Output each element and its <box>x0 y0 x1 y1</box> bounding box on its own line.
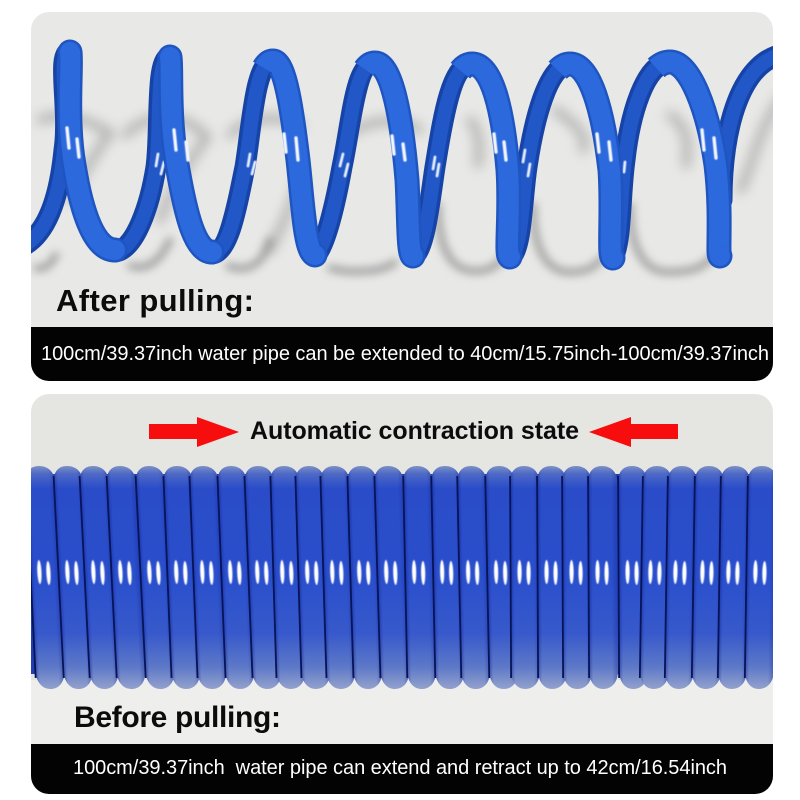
caption bar: after pulling <box>31 327 773 381</box>
heading: automatic contraction state: Automatic contraction state <box>250 417 579 445</box>
photo background <box>31 394 773 680</box>
panel: after pulling <box>25 12 790 381</box>
lower photo strip <box>31 680 773 744</box>
caption: before pulling: 100cm/39.37inch water pipe can extend and retract up to 42cm/16.54inch <box>73 757 727 779</box>
arrow: pointing right <box>149 417 239 447</box>
panel: before pulling <box>25 394 777 794</box>
back strand highlights <box>156 150 625 176</box>
arrow: pointing left <box>589 417 678 447</box>
photo background <box>31 12 773 327</box>
caption: after pulling: 100cm/39.37inch water pipe can be extended to 40cm/15.75inch-100cm/39.37inch <box>41 343 769 365</box>
heading: before pulling: Before pulling: <box>74 701 281 734</box>
heading: after pulling: After pulling: <box>56 283 254 318</box>
caption bar: before pulling <box>31 744 773 794</box>
back strands of the coil <box>25 52 790 258</box>
front strands of the coil <box>67 52 732 270</box>
contracted coil <box>25 466 777 689</box>
front strand highlights <box>67 128 716 160</box>
coil shadows <box>36 95 785 272</box>
